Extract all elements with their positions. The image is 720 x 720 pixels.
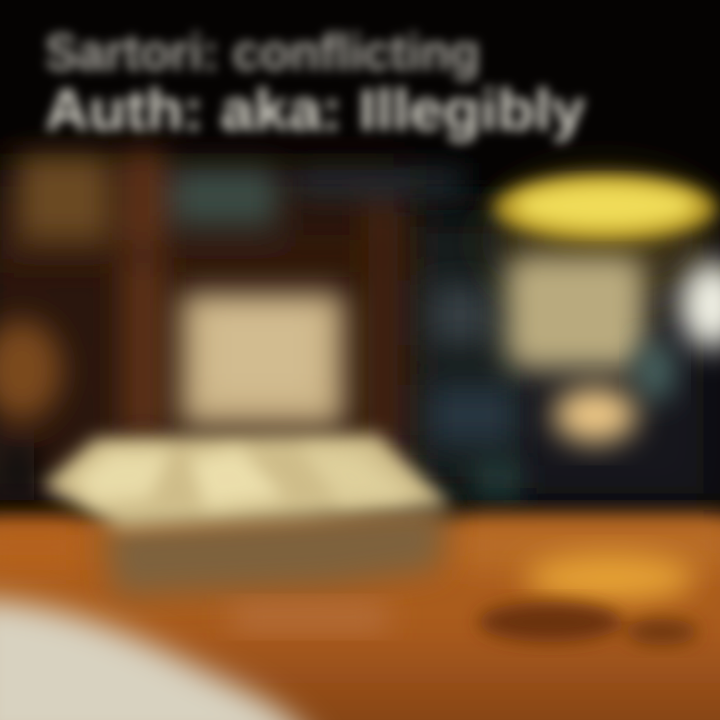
faint table text [232, 604, 387, 630]
title [45, 24, 585, 143]
coins pile [478, 554, 698, 645]
lamp [493, 174, 717, 443]
white light [680, 261, 720, 349]
foreground cloth [0, 598, 320, 720]
open book [42, 434, 450, 595]
title: Sartori: conflicting [45, 24, 480, 82]
wooden table [0, 518, 720, 720]
bookshelf [0, 150, 720, 510]
title: Auth: aka: Illegibly [45, 78, 585, 143]
upright book [180, 292, 345, 427]
